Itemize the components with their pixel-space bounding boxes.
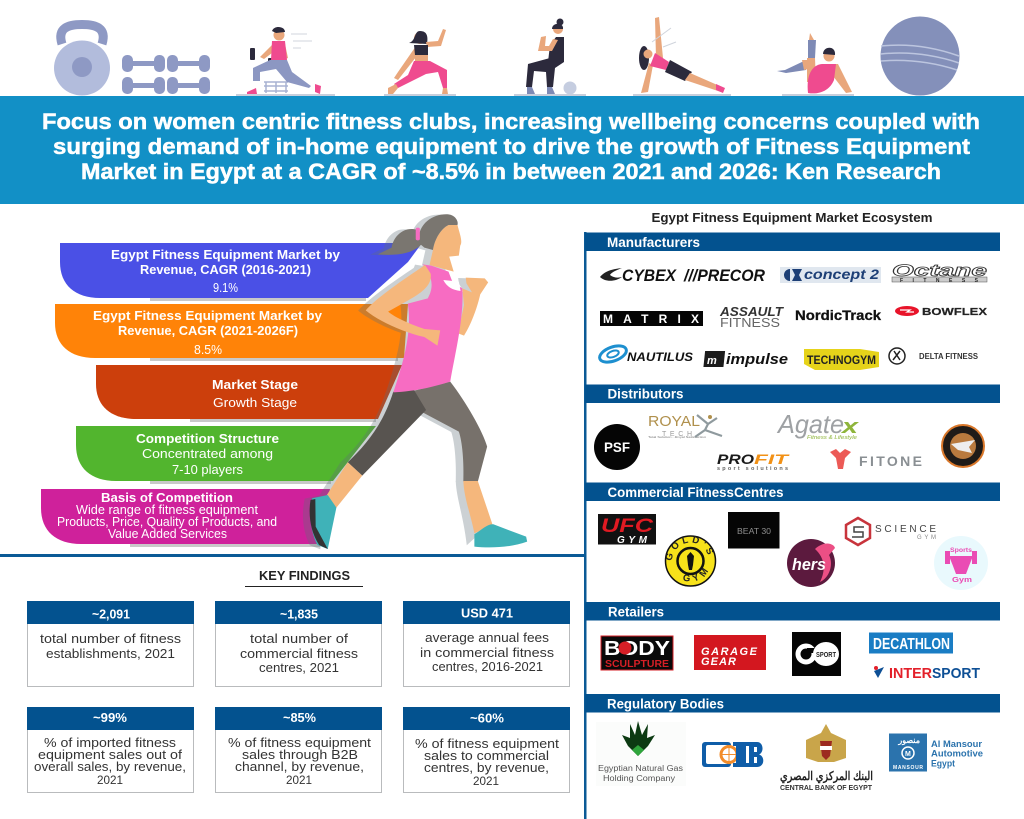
- logo: Impulse: [703, 351, 788, 368]
- card: B2B channel: [215, 707, 382, 792]
- logo: Agatex: x: [841, 416, 859, 438]
- logo: Agatex: Agate: [776, 409, 844, 439]
- logo: Agatex: Fitness & Lifestyle: [807, 435, 857, 441]
- card: B2B channel: 2021: [286, 773, 312, 787]
- panel: distributors: [585, 384, 1000, 472]
- logo: Body Sculpture: SCULPTURE: [605, 659, 669, 670]
- panel: regulatory bodies: [585, 694, 1000, 792]
- section header: regulatory bodies: Regulatory Bodies: [607, 696, 724, 712]
- logo: Cybex: [600, 266, 678, 285]
- panel: key findings: [27, 569, 570, 792]
- bar: CAGR 2016-2021: Egypt Fitness Equipment Market by: [111, 247, 341, 262]
- logo: UFC Gym: [598, 514, 656, 546]
- logo: Bowflex: [895, 306, 987, 318]
- logo: round mascot badge: [942, 425, 984, 467]
- card: B2B channel: sales through B2B: [242, 747, 358, 762]
- logo: UFC Gym: UFC: [601, 516, 653, 537]
- card: commercial centres: [215, 601, 382, 686]
- figure: woman doing seated leg raise: [777, 33, 854, 96]
- logo: Body Sculpture: BODY: [604, 638, 671, 660]
- logo: Intersport: [874, 665, 980, 682]
- logo: pink gym mascot: Sports: [950, 548, 973, 554]
- logo: Concept2: concept 2: [804, 266, 879, 282]
- divider: section rule: [0, 554, 586, 557]
- logo: Body Sculpture: [601, 636, 673, 670]
- logo: Technogym: [804, 349, 879, 370]
- logo: Concept2: [780, 266, 881, 283]
- logo: Impulse: m: [707, 355, 717, 367]
- logo: Go Sport: [792, 632, 841, 676]
- card: B2B channel: ~85%: [283, 710, 316, 725]
- bar: competition structure: 7-10 players: [172, 462, 243, 477]
- section header: retailers: [585, 602, 1000, 620]
- bar: basis of competition: Basis of Competition: [101, 490, 233, 505]
- bar: CAGR 2021-2026F: 8.5%: [194, 342, 222, 357]
- logo: Bowflex: BOWFLEX: [922, 307, 987, 318]
- logo: Assault Fitness: ASSAULT: [719, 304, 784, 319]
- figure: woman lunging with dumbbells: [236, 27, 335, 96]
- card: establishments: [27, 601, 194, 686]
- figure: woman squatting beside ball: [514, 18, 586, 96]
- logo: Nautilus: NAUTILUS: [627, 350, 693, 364]
- logo: Impulse: impulse: [726, 351, 788, 368]
- logo: Royal Tech: ROYAL: [648, 413, 700, 430]
- card: annual fees: centres, 2016-2021: [432, 659, 543, 674]
- heading: key findings: [245, 569, 363, 587]
- panel: retailers: [585, 602, 1000, 682]
- logo: Assault Fitness: [719, 304, 784, 330]
- bar: competition structure: [76, 426, 376, 484]
- card: annual fees: [403, 601, 570, 686]
- card: imported sales: 2021: [97, 773, 123, 787]
- bar: basis of competition: [41, 489, 330, 547]
- title: [42, 109, 980, 184]
- card: commercial centres: commercial fitness: [240, 646, 359, 661]
- logo: Profit: PRO: [717, 451, 754, 467]
- section header: retailers: Retailers: [608, 604, 664, 620]
- logo: Hers: [787, 539, 835, 587]
- logo: Assault Fitness: FITNESS: [720, 315, 780, 330]
- logo: UFC Gym: GYM: [617, 535, 648, 546]
- logo: Cybex: CYBEX: [622, 266, 678, 285]
- logo: Royal Tech: Total Solution...Royal Satisfaction: [648, 435, 706, 439]
- figure: woman in side plank: [633, 17, 731, 96]
- logo: Decathlon: [869, 632, 953, 654]
- logo: Profit: [717, 451, 790, 472]
- title: Market in Egypt at a CAGR of ~8.5% in between 2021 and 2026: Ken Research: [81, 159, 941, 184]
- section header: manufacturers: Manufacturers: [607, 235, 700, 250]
- logo: Hers: hers: [792, 555, 826, 574]
- logo: Beat 30: [728, 512, 780, 548]
- bar: market stage: Market Stage: [212, 377, 298, 392]
- card: commercial centres: ~1,835: [280, 606, 318, 622]
- logo: Octane Fitness: FITNESS: [900, 278, 979, 284]
- logo: Royal Tech: [648, 413, 722, 439]
- divider: column rule: [584, 232, 586, 819]
- logo: Central Bank of Egypt: [780, 724, 873, 792]
- bar: CAGR 2021-2026F: Revenue, CAGR (2021-2026F): [118, 323, 298, 338]
- logo: Beat 30: BEAT 30: [737, 527, 772, 536]
- bar: basis of competition: Wide range of fitness equipment: [76, 502, 258, 517]
- panel: market summary bars: [41, 243, 422, 547]
- bar: CAGR 2021-2026F: Egypt Fitness Equipment Market by: [93, 308, 323, 323]
- card: establishments: total number of fitness: [40, 631, 182, 646]
- card: commercial centres: total number of: [250, 631, 348, 646]
- card: establishments: establishments, 2021: [46, 646, 175, 661]
- card: imported sales: [27, 707, 194, 792]
- logo: Al Mansour Automotive: Al Mansour: [931, 739, 982, 750]
- section header: commercial fitness centres: [585, 482, 1000, 501]
- logo: Gold's Gym: GOLD'S: [666, 536, 713, 560]
- bar: basis of competition: Products, Price, Quality of Products, and: [57, 514, 277, 529]
- logo: PSF: PSF: [604, 439, 630, 455]
- bar: CAGR 2016-2021: 9.1%: [213, 280, 238, 295]
- card: commercial centre sales: % of fitness equipment: [415, 736, 559, 751]
- section header: distributors: Distributors: [608, 386, 684, 402]
- bar: market stage: Growth Stage: [213, 395, 297, 410]
- bar: CAGR 2016-2021: [60, 243, 422, 301]
- logo: Garage Gear: GEAR: [701, 656, 736, 668]
- illustration: running woman: [303, 214, 527, 549]
- panel: manufacturers: [585, 232, 1000, 370]
- logo: Fitone: [830, 449, 922, 469]
- logo: Gold's Gym: [664, 535, 716, 587]
- card: commercial centre sales: ~60%: [470, 710, 504, 726]
- icon: kettlebell: [54, 24, 110, 96]
- card: annual fees: USD 471: [461, 606, 513, 620]
- logo: Science Gym: [846, 518, 936, 545]
- logo: NordicTrack: NordicTrack: [795, 307, 881, 323]
- card: commercial centre sales: centres, by revenue,: [424, 760, 549, 775]
- logo: Al Mansour Automotive: Automotive: [931, 748, 983, 760]
- bar: market stage: [96, 365, 402, 422]
- heading: ecosystem: Egypt Fitness Equipment Market Ecosystem: [652, 211, 932, 225]
- title: surging demand of in-home equipment to drive the growth of Fitness Equipment: [53, 134, 971, 159]
- card: commercial centre sales: sales to commercial: [424, 748, 549, 763]
- icon: exercise ball: [880, 16, 960, 96]
- card: annual fees: in commercial fitness: [420, 645, 555, 660]
- logo: Octane Fitness: Octane: [892, 261, 987, 280]
- panel: commercial fitness centres: [586, 482, 1000, 590]
- section header: manufacturers: [585, 232, 1000, 251]
- logo: Nautilus: [597, 343, 693, 365]
- logo: Matrix: MATRIX: [603, 312, 699, 326]
- card: imported sales: overall sales, by revenue,: [34, 759, 186, 774]
- logo: Al Mansour Automotive: منصور: [897, 736, 920, 746]
- logo: Profit: FIT: [754, 451, 790, 467]
- bar: basis of competition: Value Added Services: [108, 526, 227, 541]
- logo: Royal Tech: TECH: [662, 431, 692, 438]
- card: imported sales: % of imported fitness: [44, 735, 177, 750]
- logo: Gold's Gym: GYM: [683, 568, 708, 582]
- bar: competition structure: Concentrated among: [142, 446, 273, 461]
- logo: Intersport: INTER: [889, 665, 932, 682]
- logo: CIB: [702, 742, 763, 767]
- section header: regulatory bodies: [585, 694, 1000, 712]
- logo: Egyptian Natural Gas: [596, 721, 686, 786]
- card: annual fees: average annual fees: [425, 630, 550, 645]
- section header: distributors: [585, 384, 1000, 403]
- logo: Garage Gear: GARAGE: [701, 646, 758, 658]
- card: B2B channel: % of fitness equipment: [228, 735, 371, 750]
- logo: Central Bank of Egypt: البنك المركزي المصري: [780, 769, 873, 784]
- card: imported sales: ~99%: [93, 710, 127, 725]
- logo: Al Mansour Automotive: M: [905, 751, 911, 758]
- logo: Fitone: FITONE: [859, 453, 922, 469]
- logo: PSF: [594, 424, 640, 470]
- logo: Egyptian Natural Gas: Holding Company: [603, 774, 675, 783]
- logo: Egyptian Natural Gas: Egyptian Natural Gas: [598, 764, 683, 773]
- logo: Decathlon: DECATHLON: [873, 636, 950, 653]
- logo: Delta Fitness: [889, 348, 979, 364]
- logo: Octane Fitness: [892, 261, 987, 284]
- bar: competition structure: Competition Structure: [136, 431, 279, 446]
- logo: Science Gym: SCIENCE: [875, 524, 936, 535]
- logo: Al Mansour Automotive: MANSOUR: [893, 765, 923, 771]
- bar: CAGR 2021-2026F: [55, 304, 408, 361]
- section header: commercial fitness centres: Commercial FitnessCentres: [608, 485, 784, 500]
- header banner: [0, 96, 1024, 204]
- logo: Science Gym: GYM: [917, 535, 936, 541]
- figure: woman in side lunge: [384, 29, 456, 96]
- card: imported sales: equipment sales out of: [38, 747, 182, 762]
- bar: CAGR 2016-2021: Revenue, CAGR (2016-2021): [140, 262, 311, 277]
- logo: Precor: ///PRECOR: [683, 266, 766, 285]
- card: establishments: ~2,091: [92, 606, 130, 622]
- logo: Al Mansour Automotive: [889, 734, 983, 772]
- card: commercial centres: centres, 2021: [259, 660, 339, 675]
- logo: Garage Gear: [694, 635, 766, 670]
- card: B2B channel: channel, by revenue,: [235, 759, 364, 774]
- logo: Central Bank of Egypt: CENTRAL BANK OF EGYPT: [780, 785, 873, 792]
- logo: pink gym mascot: [934, 536, 988, 590]
- title: Focus on women centric fitness clubs, increasing wellbeing concerns coupled with: [42, 109, 980, 134]
- logo: Go Sport: SPORT: [816, 652, 837, 659]
- logo: Profit: sport solutions: [717, 466, 788, 472]
- icon: dumbbells: [122, 55, 210, 94]
- card: commercial centre sales: [403, 707, 570, 792]
- card: commercial centre sales: 2021: [473, 774, 499, 788]
- logo: Intersport: SPORT: [932, 665, 980, 682]
- logo: pink gym mascot: Gym: [952, 577, 972, 584]
- logo: Technogym: TECHNOGYM: [807, 353, 876, 367]
- logo: Al Mansour Automotive: Egypt: [931, 758, 956, 770]
- logo: Delta Fitness: DELTA FITNESS: [919, 352, 979, 361]
- heading: key findings: KEY FINDINGS: [259, 569, 350, 583]
